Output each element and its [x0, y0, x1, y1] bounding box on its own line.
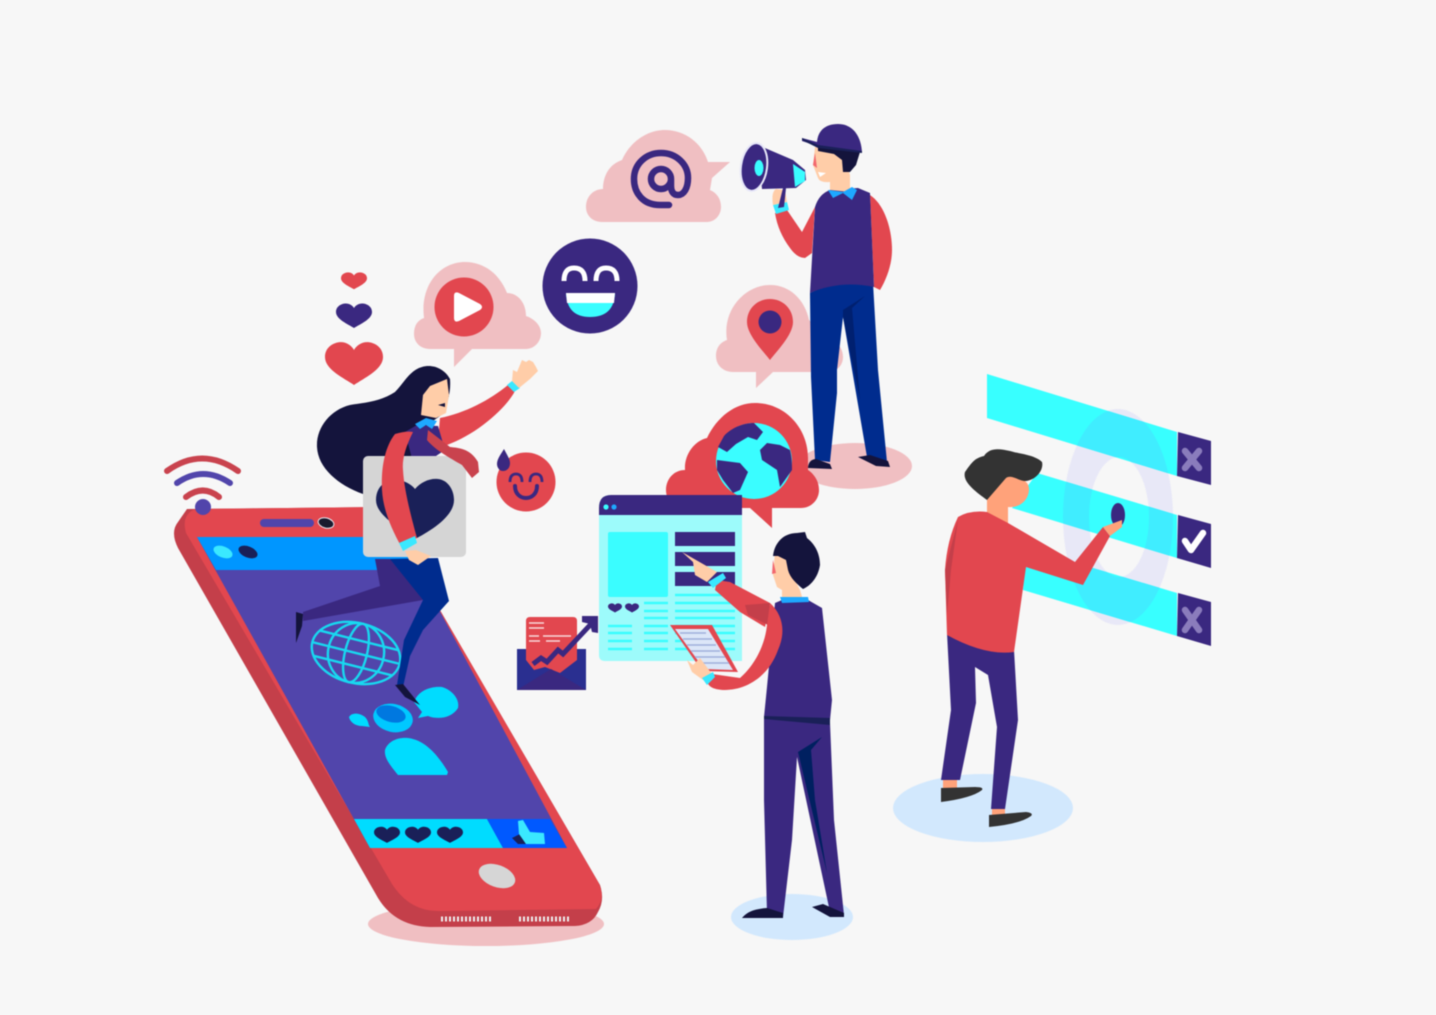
text lines [608, 595, 735, 649]
face [421, 379, 449, 418]
image placeholder [608, 532, 668, 597]
trousers [941, 633, 1018, 809]
phone face [185, 507, 602, 911]
speaker grills [441, 916, 569, 922]
heart card [363, 456, 466, 557]
raised arm [775, 207, 815, 258]
floor shadow [798, 443, 912, 489]
front leg [390, 558, 449, 687]
ankles [943, 778, 1005, 816]
trousers [764, 718, 844, 917]
ring tint [1063, 409, 1173, 625]
content bars [675, 532, 735, 586]
lower arm [707, 603, 782, 690]
vest [810, 188, 874, 293]
torso [764, 600, 832, 720]
neck and face [987, 476, 1029, 525]
waving hand [512, 360, 538, 388]
shoes [808, 459, 832, 469]
megaphone [738, 141, 806, 208]
hair [773, 532, 820, 589]
face [773, 550, 803, 600]
back leg [303, 559, 423, 621]
mini hearts [608, 603, 622, 612]
screen bottom bar [354, 819, 567, 848]
hearts stack [325, 272, 383, 385]
hair [965, 449, 1042, 500]
raised arm [438, 385, 515, 445]
home button [475, 859, 519, 893]
collar [828, 187, 857, 200]
scarf [427, 430, 479, 478]
illustration: social media marketing scene [163, 123, 1212, 946]
screen [197, 537, 567, 848]
phone shadow [368, 902, 604, 946]
x and check marks [1185, 451, 1203, 630]
arm holding card [382, 432, 417, 546]
status squares [1177, 432, 1211, 646]
trousers [810, 282, 887, 462]
screen chat bubbles and user [349, 687, 458, 775]
big smiling emoji [542, 238, 638, 334]
target dot [1111, 503, 1125, 527]
tablet hand [687, 658, 712, 680]
front shoe [395, 684, 420, 705]
cuff [399, 536, 417, 551]
cap [802, 124, 862, 152]
man pointing at page [670, 532, 853, 940]
torso [405, 425, 445, 470]
back shoe [296, 612, 303, 643]
envelope with growth chart [517, 616, 598, 690]
man with megaphone [738, 124, 912, 489]
location pin cloud [716, 285, 843, 388]
play video cloud [414, 262, 541, 367]
hair [317, 366, 450, 494]
man at checklist [893, 449, 1122, 842]
web page panel [599, 495, 742, 661]
neck and face [813, 147, 850, 192]
pointing hand [682, 552, 717, 582]
shoes [941, 787, 982, 802]
small red emoji [496, 449, 556, 512]
lavender ring [1063, 409, 1173, 625]
speaker and camera [260, 516, 335, 530]
hand [1103, 520, 1122, 536]
checklist panel [987, 374, 1211, 646]
shirt [945, 512, 1110, 653]
collar [780, 597, 809, 603]
phone body side [174, 507, 602, 927]
shoes [742, 908, 783, 918]
icon: wifi signal [167, 458, 238, 515]
raised arm [715, 580, 770, 627]
floor shadow [731, 894, 853, 940]
at-sign cloud [586, 130, 730, 222]
globe cloud [666, 403, 819, 528]
cyan bars [987, 374, 1177, 636]
screen globe [305, 613, 407, 693]
hair [818, 146, 860, 172]
far arm [870, 195, 892, 290]
tablet [670, 625, 738, 672]
screen top bar [197, 537, 418, 570]
hand [405, 550, 431, 565]
woman on phone [296, 360, 538, 705]
smartphone [174, 507, 602, 927]
collar [415, 418, 437, 429]
floor shadow [893, 774, 1073, 842]
